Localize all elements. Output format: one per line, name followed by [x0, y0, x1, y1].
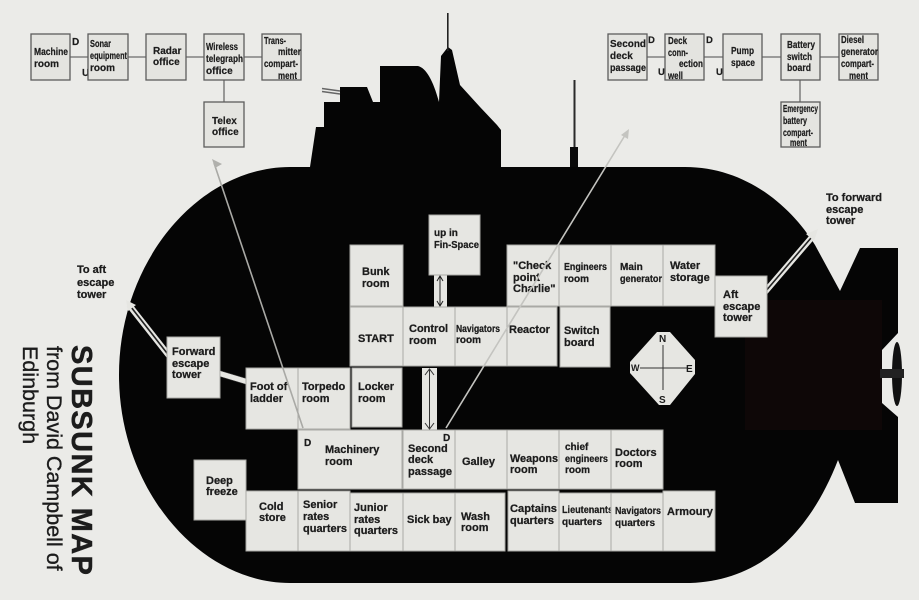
compass [630, 332, 695, 406]
room: sonar equipment room: Sonar [90, 39, 111, 50]
room: lieutenants quarters: Lieutenants [562, 505, 613, 516]
escape passage: to aft tower [126, 300, 170, 357]
propeller [880, 342, 904, 406]
room: machinery room [298, 430, 402, 489]
room: up in fin-space: Fin-Space [434, 240, 479, 251]
note: to forward escape tower [826, 192, 882, 227]
vertical ladder shaft [422, 368, 437, 430]
room: navigators quarters: quarters [615, 518, 655, 529]
room: switch board: Switch [564, 325, 600, 337]
room: foot of ladder: ladder [250, 393, 284, 405]
label: U: U [716, 67, 723, 78]
room: armoury [663, 491, 715, 551]
room: navigators quarters [611, 493, 663, 551]
room: transmitter compartment: Trans- [264, 36, 286, 47]
room: junior rates quarters: Junior [354, 502, 388, 514]
arrow: from second deck passage up to the aft chain [446, 129, 629, 428]
room: aft escape tower: Aft [723, 289, 739, 301]
room: battery switch board: switch [787, 52, 812, 63]
room: engineers room [559, 245, 611, 306]
map title, rotated: from David Campbell of [42, 346, 66, 571]
room: aft escape tower [715, 276, 767, 337]
room: forward escape tower: Forward [172, 346, 215, 358]
map title, rotated [18, 345, 97, 576]
room: battery switch board: Battery [787, 40, 815, 51]
room: senior rates quarters: rates [303, 511, 329, 523]
room: check point charlie: point [513, 272, 540, 284]
room: emergency battery compartment: ment [790, 138, 807, 149]
note: to forward escape tower: tower [826, 215, 856, 227]
room: emergency battery compartment [781, 102, 820, 149]
room: start [350, 307, 403, 366]
room: junior rates quarters: quarters [354, 525, 398, 537]
room: locker room: room [358, 393, 386, 405]
room: second deck passage: passage [610, 63, 646, 74]
room: check point charlie [507, 245, 559, 306]
room: radar office: office [153, 57, 180, 68]
room: sonar equipment room [88, 34, 128, 80]
room: galley: Galley [462, 456, 496, 468]
compass: E [686, 364, 693, 375]
room: wireless telegraph office: Wireless [206, 42, 238, 53]
room: aft escape tower: tower [723, 312, 753, 324]
room: diesel generator compartment: Diesel [841, 35, 864, 46]
room: chief engineers room: room [565, 465, 590, 476]
room: wash room: Wash [461, 511, 490, 523]
room: deep freeze: Deep [206, 475, 233, 487]
room: sonar equipment room: room [90, 63, 115, 74]
room: senior rates quarters: quarters [303, 523, 347, 535]
room: junior rates quarters [350, 493, 403, 551]
room: captains quarters: quarters [510, 515, 554, 527]
room: doctors room: room [615, 458, 643, 470]
room: chief engineers room [559, 430, 611, 489]
room: radar office [146, 34, 186, 80]
room: transmitter compartment: compart- [264, 59, 298, 70]
room: second deck passage: D [443, 433, 450, 444]
label: U: U [658, 67, 665, 78]
note: to aft escape tower: tower [77, 289, 107, 301]
room: doctors room: Doctors [615, 447, 657, 459]
room: second deck passage [608, 34, 647, 80]
passage: forward tower to foot of ladder [218, 370, 248, 385]
room: sonar equipment room: equipment [90, 51, 127, 62]
room: captains quarters [508, 491, 559, 551]
room: deck connection well: conn- [668, 48, 688, 59]
room: wash room [455, 493, 505, 551]
room: main generator [611, 245, 663, 306]
room: second deck passage: Second [610, 39, 646, 50]
room: second deck passage [403, 430, 455, 489]
room: reactor [507, 307, 557, 366]
room: pump space: Pump [731, 46, 754, 57]
room: sick bay [403, 493, 455, 551]
room: water storage: storage [670, 272, 710, 284]
room: deck connection well: Deck [668, 36, 687, 47]
note: to forward escape tower: escape [826, 204, 863, 216]
room: emergency battery compartment: Emergency [783, 104, 818, 115]
room: deck connection well: ection [679, 59, 703, 70]
room: bunk room: Bunk [362, 266, 390, 278]
fin ladder arrow [434, 275, 447, 307]
room: radar office: Radar [153, 46, 181, 57]
room: battery switch board [781, 34, 820, 80]
room: control room [403, 307, 455, 366]
room: chief engineers room: chief [565, 442, 589, 453]
room: emergency battery compartment: compart- [783, 128, 813, 139]
room: control room: room [409, 335, 437, 347]
note: to forward escape tower: To forward [826, 192, 882, 204]
room: second deck passage: deck [408, 454, 434, 466]
top right compartment chain [608, 34, 878, 149]
room: engineers room: Engineers [564, 262, 607, 273]
room: torpedo room: Torpedo [302, 381, 345, 393]
room: up in fin-space: up in [434, 228, 458, 239]
room: water storage [663, 245, 715, 306]
rooms on the main deck [167, 215, 767, 551]
arrow: from machinery room up to the forward chain [212, 159, 303, 428]
room: switch board: board [564, 337, 595, 349]
room: cold store: store [259, 512, 286, 524]
room: switch board [560, 307, 610, 367]
room: lieutenants quarters [559, 493, 613, 551]
room: foot of ladder [246, 368, 298, 429]
room: water storage: Water [670, 260, 701, 272]
room: second deck passage: Second [408, 443, 448, 455]
compass: N [659, 334, 666, 345]
room: transmitter compartment: ment [278, 71, 298, 82]
room: emergency battery compartment: battery [783, 116, 807, 127]
note: to aft escape tower: escape [77, 277, 114, 289]
room: machinery room: Machinery [325, 444, 380, 456]
room: aft escape tower: escape [723, 301, 760, 313]
room: pump space: space [731, 58, 755, 69]
room: machine room: Machine [34, 47, 68, 58]
room: second deck passage: passage [408, 466, 452, 478]
room: telex office: Telex [212, 116, 237, 127]
room: locker room [352, 368, 402, 427]
room: cold store: Cold [259, 501, 283, 513]
note: to aft escape tower: To aft [77, 264, 106, 276]
room: bunk room [350, 245, 403, 306]
room: machinery room: D [304, 438, 311, 449]
room: diesel generator compartment: compart- [841, 59, 874, 70]
room: galley [455, 430, 507, 489]
room: weapons room [507, 430, 559, 489]
room: forward escape tower: escape [172, 358, 209, 370]
room: weapons room: room [510, 464, 538, 476]
room: junior rates quarters: rates [354, 514, 380, 526]
room: machinery room: room [325, 456, 353, 468]
room: wireless telegraph office [204, 34, 244, 80]
room: weapons room: Weapons [510, 453, 558, 465]
room: deck connection well [665, 34, 704, 82]
room: machine room [31, 34, 70, 80]
note: to aft escape tower [77, 264, 114, 301]
room: chief engineers room: engineers [565, 454, 608, 465]
room: forward escape tower: tower [172, 369, 202, 381]
room: navigators room: Navigators [456, 324, 500, 335]
room: engineers room: room [564, 274, 589, 285]
room: armoury: Armoury [667, 506, 714, 518]
room: wireless telegraph office: telegraph [206, 54, 243, 65]
room: transmitter compartment: mitter [278, 47, 301, 58]
room: lieutenants quarters: quarters [562, 517, 602, 528]
room: start: START [358, 333, 394, 345]
room: bunk room: room [362, 278, 390, 290]
room: senior rates quarters: Senior [303, 499, 338, 511]
room: captains quarters: Captains [510, 503, 557, 515]
room: deep freeze [194, 460, 246, 520]
room: transmitter compartment [262, 34, 301, 82]
compass: W [631, 363, 640, 373]
room: doctors room [611, 430, 663, 489]
room: second deck passage: deck [610, 51, 633, 62]
room: pump space [723, 34, 762, 80]
room: torpedo room [298, 368, 350, 429]
room: diesel generator compartment: ment [849, 71, 869, 82]
room: machine room: room [34, 59, 59, 70]
room: check point charlie: Charlie" [513, 283, 556, 295]
room: deep freeze: freeze [206, 486, 238, 498]
room: telex office: office [212, 127, 239, 138]
room: telex office [204, 102, 244, 147]
label: U: U [82, 68, 89, 79]
room: foot of ladder: Foot of [250, 381, 288, 393]
compass: S [659, 395, 666, 406]
room: main generator: Main [620, 262, 643, 273]
map title, rotated: Edinburgh [18, 346, 42, 444]
room: navigators room: room [456, 335, 481, 346]
room: diesel generator compartment [839, 34, 878, 82]
room: navigators room [455, 307, 507, 366]
map title, rotated: SUBSUNK MAP [65, 345, 97, 576]
room: sick bay: Sick bay [407, 514, 453, 526]
room: deck connection well: well [667, 71, 683, 82]
escape passage: to forward tower [765, 229, 818, 292]
label: D: D [706, 35, 713, 46]
room: main generator: generator [620, 274, 662, 285]
room: navigators quarters: Navigators [615, 506, 661, 517]
room: battery switch board: board [787, 63, 811, 74]
label: D: D [72, 37, 79, 48]
room: diesel generator compartment: generator [841, 47, 878, 58]
room: forward escape tower [167, 337, 220, 398]
room: up in fin-space [429, 215, 480, 275]
label: D: D [648, 35, 655, 46]
room: check point charlie: "Check [513, 260, 552, 272]
room: control room: Control [409, 323, 448, 335]
room: senior rates quarters [298, 491, 350, 551]
room: locker room: Locker [358, 381, 395, 393]
room: cold store [246, 491, 298, 551]
room: reactor: Reactor [509, 324, 551, 336]
room: wash room: room [461, 522, 489, 534]
room: torpedo room: room [302, 393, 330, 405]
room: wireless telegraph office: office [206, 66, 233, 77]
top left compartment chain [31, 34, 301, 147]
